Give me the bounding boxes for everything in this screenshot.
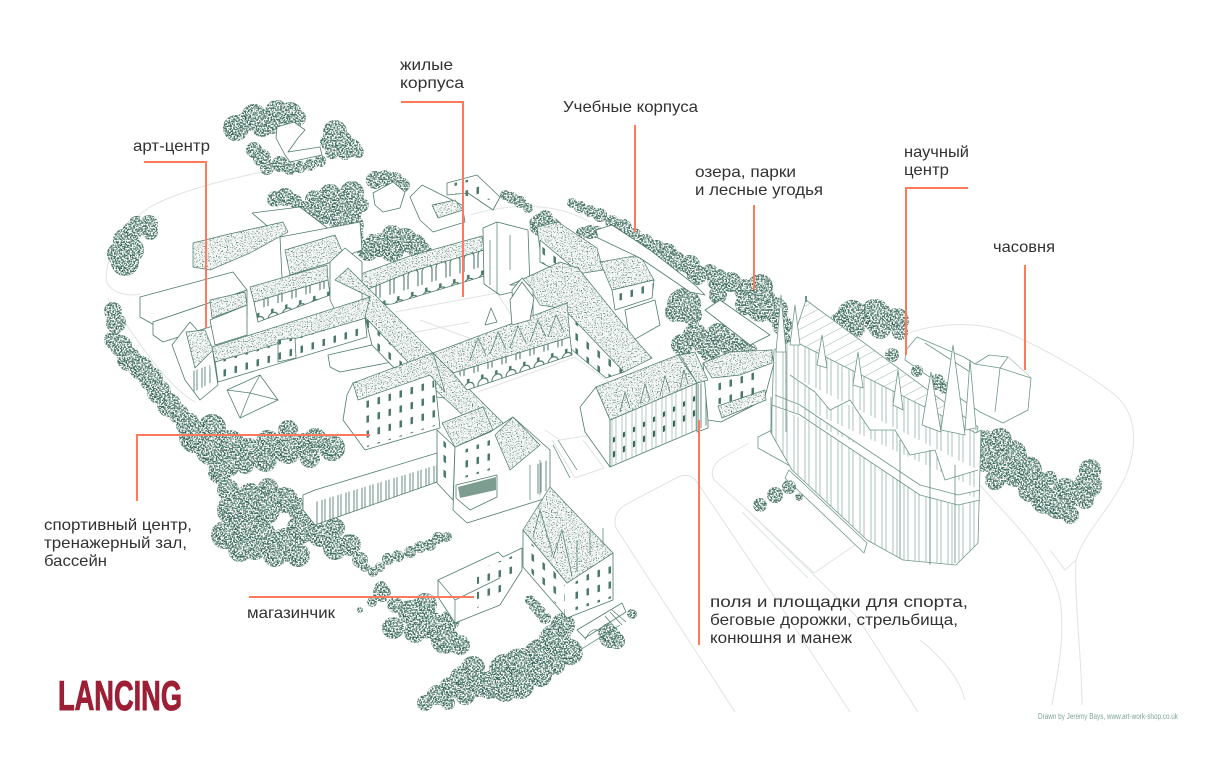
campus buildings: mid blocks	[303, 353, 577, 525]
trees: south grove	[359, 583, 635, 709]
leader: chapel	[1024, 265, 1026, 370]
trees: south-west grove	[213, 480, 450, 575]
trees: behind chapel	[887, 350, 1100, 522]
leader: lakes and parks	[753, 205, 755, 290]
label: science centre: научный	[904, 144, 969, 161]
trees: north-east belt	[569, 200, 907, 360]
label: art centre: арт-центр	[133, 138, 210, 155]
label: lakes, parks and woodlands: озера, парки	[695, 164, 796, 181]
building: chapel	[758, 295, 981, 565]
credit line: Drawn by Jeremy Bays, www.art-work-shop.co.uk	[1038, 712, 1179, 721]
label: residential buildings: корпуса	[400, 75, 464, 92]
leader: sports fields	[698, 420, 700, 645]
roads and paths	[106, 165, 1134, 712]
campus buildings: east ranges	[510, 222, 770, 378]
leader: sports centre	[137, 435, 370, 501]
label: sports centre, gym, pool: спортивный центр,	[44, 517, 192, 534]
label: chapel: часовня	[993, 239, 1055, 256]
building: southern house	[438, 487, 626, 650]
building: east hall	[580, 350, 774, 467]
trees: north groves	[269, 172, 601, 260]
label: sports fields: поля и площадки для спорта,	[710, 594, 968, 611]
label: shop: магазинчик	[247, 605, 336, 622]
label: science centre: центр	[904, 162, 949, 179]
leader: art centre	[144, 162, 206, 328]
building: science centre	[905, 337, 1031, 423]
label: lakes, parks and woodlands: и лесные угодья	[695, 182, 823, 199]
campus buildings: central diagonal wing	[335, 268, 505, 440]
campus buildings: west wing	[172, 297, 392, 418]
campus buildings: south range	[433, 282, 572, 390]
label: sports fields: конюшня и манеж	[710, 630, 852, 647]
trees: chapel garden	[755, 482, 801, 510]
label: residential buildings: жилые	[400, 57, 453, 74]
campus buildings: back range	[140, 122, 530, 345]
trees: top cluster	[225, 102, 362, 173]
leader: residential buildings	[401, 102, 463, 297]
leader: shop	[249, 596, 474, 598]
label: academic buildings: Учебные корпуса	[563, 99, 698, 116]
logo: Lancing: LANCING	[58, 672, 182, 719]
leader: academic buildings	[634, 125, 636, 232]
label: sports fields: беговые дорожки, стрельбища,	[710, 612, 958, 629]
label: sports centre, gym, pool: бассейн	[44, 553, 107, 570]
label: sports centre, gym, pool: тренажерный зал,	[44, 535, 187, 552]
leader: science centre	[906, 188, 968, 355]
trees: west belt	[106, 217, 343, 482]
